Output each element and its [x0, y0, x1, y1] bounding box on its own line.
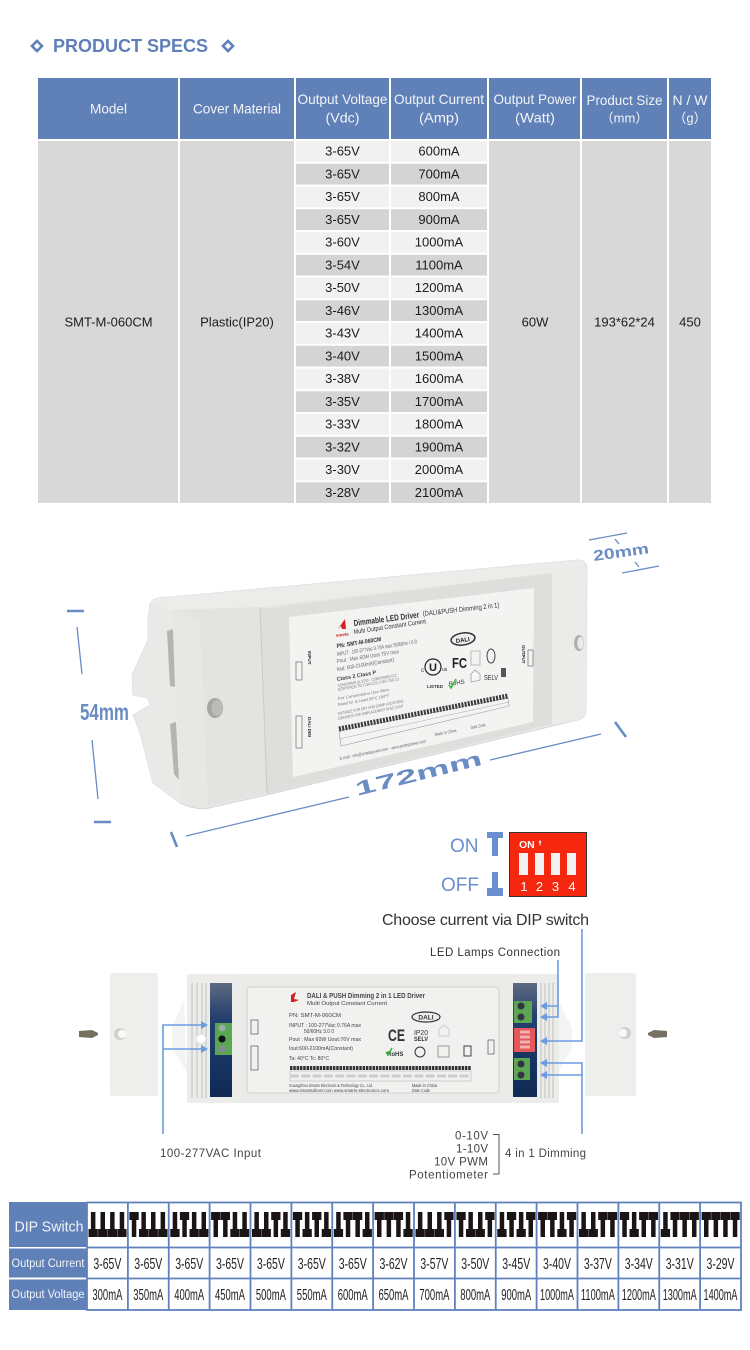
caption: dimming options: 10V PWM [434, 1156, 488, 1168]
dimension: 20mm [589, 533, 659, 573]
table voltage and current rows: 3-28V [325, 485, 360, 500]
icon: red DIP switch: 3 [552, 879, 559, 894]
icon: red DIP switch: 1 [520, 879, 528, 894]
label DIP table [290, 1068, 471, 1081]
table voltage and current rows: 1600mA [415, 371, 464, 386]
main cover with label: www.smartsdriver.com www.smarts-electronics.com [289, 1088, 389, 1093]
voltage values: 3-34V [625, 1256, 653, 1273]
current values: 500mA [256, 1287, 286, 1304]
on and off labels: ON [450, 836, 478, 857]
voltage values: 3-65V [175, 1256, 203, 1273]
current values: 800mA [460, 1287, 490, 1304]
table voltage and current rows: 2000mA [415, 462, 464, 477]
current values: 1300mA [663, 1287, 697, 1304]
heading: product specs: PRODUCT SPECS [53, 36, 208, 56]
main cover with label: Date Code [412, 1088, 430, 1093]
product label: CONVERTS FOR DIMPLACEMENT IN IEC 61347 [337, 703, 405, 721]
label certification marks: DALI [456, 637, 471, 645]
table voltage and current rows: 3-50V [325, 280, 360, 295]
product photo: opened driver top view [79, 973, 667, 1103]
product label: (DALI&PUSH Dimming 2 in 1) [422, 602, 500, 618]
table voltage and current rows: 3-46V [325, 303, 360, 318]
DIP switch legend [441, 832, 586, 896]
table voltage and current rows: 3-33V [325, 416, 360, 432]
table header row: Model [90, 100, 127, 116]
current values: 550mA [297, 1287, 327, 1304]
right housing fins [513, 974, 572, 1103]
table voltage and current rows: 1300mA [415, 303, 464, 318]
label logo [291, 992, 299, 1002]
row headers [9, 1202, 87, 1310]
label certification marks: RoHS [387, 1052, 403, 1058]
table merged columns: Plastic(IP20) [200, 314, 274, 330]
product label: Made in China [434, 728, 457, 737]
table voltage and current rows: 3-30V [325, 462, 360, 477]
label certification marks: U [429, 662, 437, 674]
table merged columns: 60W [522, 314, 549, 330]
label side terminals: INPUT [307, 651, 312, 665]
product photo: LED driver perspective view [132, 560, 587, 809]
table header row: (Amp) [419, 110, 459, 126]
current values: 1100mA [581, 1287, 615, 1304]
voltage values: 3-29V [706, 1256, 735, 1273]
icon: right screw [648, 1030, 667, 1038]
icon: off switch [487, 872, 503, 896]
voltage values: 3-57V [420, 1256, 449, 1273]
table merged columns: 450 [679, 314, 701, 330]
table voltage and current rows: 3-32V [325, 439, 360, 454]
product label: Dimmable LED Driver [353, 609, 420, 628]
table header row: (Vdc) [326, 110, 360, 126]
table voltage and current rows: 3-60V [325, 234, 360, 250]
product label [289, 588, 534, 777]
right terminal and red switch [514, 1001, 535, 1080]
label DIP table [339, 698, 509, 746]
product label: PN: SMT-M-060CM [336, 637, 382, 650]
voltage values: 3-65V [134, 1256, 163, 1273]
icon: red DIP switch: ON [519, 839, 535, 851]
table voltage and current rows: 3-40V [325, 348, 360, 363]
table header row: Cover Material [193, 100, 281, 116]
table voltage and current rows: 1700mA [415, 394, 464, 409]
label side terminals [251, 1020, 494, 1070]
ear shading [132, 604, 182, 803]
icon: red DIP switch: 2 [536, 879, 543, 894]
product label: Date Code [470, 722, 486, 730]
left terminal block [215, 1023, 232, 1055]
product label: For Connections Use Wire [337, 687, 390, 701]
voltage values: 3-40V [543, 1256, 571, 1273]
label certification marks: SELV [484, 675, 498, 682]
arrows: LED lamps [540, 960, 558, 1021]
table voltage and current rows: 800mA [418, 189, 460, 204]
table merged columns: 193*62*24 [594, 314, 655, 330]
driver silhouette [132, 560, 587, 809]
dimension: 172mm [171, 722, 626, 847]
arrow: DIP switch [540, 929, 582, 1045]
caption: dimming options: 0-10V [455, 1130, 488, 1142]
label certification marks [386, 1012, 471, 1058]
mounting holes [207, 698, 223, 718]
table voltage and current rows: 1800mA [415, 416, 464, 432]
icon: on switch [487, 832, 503, 856]
caption: dimming options: 1-10V [456, 1144, 488, 1156]
caption: AC input: 100-277VAC Input [160, 1148, 262, 1160]
table merged columns: SMT-M-060CM [64, 314, 153, 330]
caption: dimming options: Potentiometer [409, 1170, 488, 1182]
table voltage and current rows: 3-54V [325, 257, 360, 272]
table voltage and current rows: 3-65V [325, 212, 360, 227]
main cover with label: Ta: 40°C Tc: 80°C [289, 1056, 329, 1062]
product label: smets [336, 631, 350, 638]
product label: INPUT : 100-277Vac 0.75A max 50/60Hz I 0.9 [336, 639, 417, 658]
icon: red DIP switch [510, 832, 586, 896]
dimension: 20mm: 20mm [592, 540, 650, 565]
label side terminals: DALI DIM [307, 717, 312, 737]
left end cap [173, 607, 267, 806]
main cover with label: Pout : Max 60W Uout:76V max [289, 1037, 361, 1043]
label certification marks [421, 631, 506, 689]
label certification marks: CE [388, 1026, 405, 1045]
label certification marks: DALI [418, 1014, 434, 1022]
arrows: AC input [163, 1021, 208, 1134]
voltage values: 3-37V [584, 1256, 612, 1273]
grid [87, 1202, 741, 1310]
table merged columns [38, 141, 711, 503]
voltage values: 3-31V [666, 1256, 694, 1273]
label certification marks: FC [452, 655, 467, 672]
product label: Rated for at Least 90°C 194°F [337, 693, 390, 707]
label certification marks: SELV [414, 1037, 428, 1043]
current values: 700mA [419, 1287, 450, 1304]
dimension: 54mm [67, 611, 129, 822]
label side terminals [296, 645, 533, 748]
label certification marks: c [421, 668, 424, 674]
icon: red DIP switch: 4 [568, 879, 576, 894]
dimension: 172mm: 172mm [353, 748, 484, 801]
caption: dimming options [409, 1130, 488, 1182]
table header row: （mm） [601, 110, 648, 126]
side slots [167, 629, 175, 687]
table voltage and current rows: 3-43V [325, 326, 360, 340]
on and off labels: OFF [441, 875, 479, 896]
label certification marks: RoHS [448, 680, 465, 688]
voltage values: 3-65V [298, 1256, 326, 1273]
product label: Multi Output Constant Current [353, 618, 427, 636]
voltage values: 3-45V [502, 1256, 530, 1273]
current values: 350mA [133, 1287, 163, 1304]
label certification marks: LISTED [427, 684, 444, 689]
current values: 650mA [378, 1287, 409, 1304]
product label: E-mail : info@smetspower.com · www.smetspower.com [339, 738, 427, 761]
label certification marks: IP20 [414, 1030, 428, 1037]
table header row: (Watt) [515, 110, 555, 126]
voltage values [93, 1256, 735, 1273]
arrows: dimming [540, 1059, 582, 1134]
table voltage and current rows: 600mA [418, 144, 460, 158]
current values: 1000mA [540, 1287, 574, 1304]
current values: 400mA [174, 1287, 204, 1304]
main cover with label: Made in China [412, 1083, 437, 1088]
table voltage and current rows: 1100mA [415, 257, 463, 272]
product label: CONFORMS UL 8750 · CONFORMS FCC [337, 673, 397, 688]
main cover with label: Iout:600-2100mA(Constant) [289, 1046, 353, 1052]
main cover with label: 50/60Hz 3.0 0 [304, 1029, 334, 1035]
voltage values: 3-65V [339, 1256, 367, 1273]
left housing fins [172, 974, 234, 1103]
table voltage and current rows: 1200mA [415, 280, 464, 295]
table voltage and current rows: 900mA [418, 212, 460, 227]
caption: 4 in 1 dimming: 4 in 1 Dimming [505, 1148, 586, 1160]
left cover piece [110, 973, 158, 1096]
caption: choose current: Choose current via DIP switch [382, 912, 589, 929]
table voltage and current rows: 3-65V [325, 189, 360, 204]
current values: 450mA [215, 1287, 245, 1304]
icon: left screw [79, 1030, 98, 1038]
current values: 1200mA [622, 1287, 656, 1304]
label certification marks: us [442, 667, 448, 673]
main cover with label: DALI & PUSH Dimming 2 in 1 LED Driver [307, 993, 425, 1000]
table voltage and current rows: 1900mA [415, 439, 464, 454]
main cover with label [232, 974, 513, 1103]
on and off labels [441, 836, 479, 896]
voltage values: 3-65V [257, 1256, 285, 1273]
current values: 900mA [501, 1287, 531, 1304]
table header row: Output Voltage [298, 91, 388, 107]
table header row [38, 78, 711, 139]
table header row: （g） [673, 110, 707, 126]
current values: 600mA [338, 1287, 368, 1304]
table voltage and current rows: 2100mA [415, 485, 464, 500]
table: product specifications [38, 78, 711, 503]
product label: Iout: 600-2100mA(Constant) [336, 657, 395, 673]
voltage values: 3-65V [93, 1256, 122, 1273]
product label: SUITABLE FOR DRY AND DAMP LOCATIONS [337, 698, 404, 716]
row headers: Output Voltage [12, 1289, 84, 1301]
product label: Class 2 Class P [336, 670, 377, 683]
table voltage and current rows: 3-35V [325, 394, 360, 409]
right cover piece [585, 973, 636, 1096]
table voltage and current rows: 1400mA [415, 326, 464, 340]
current values: 300mA [92, 1287, 123, 1304]
current values [92, 1287, 738, 1304]
table: DIP switch settings [9, 1202, 741, 1310]
table voltage and current rows: 3-65V [325, 144, 360, 158]
dimension: 54mm: 54mm [80, 699, 129, 725]
main cover with label: Multi Output Constant Current [307, 1001, 388, 1007]
table voltage and current rows: 3-65V [325, 166, 360, 181]
product label: Pout : Max 60W Uout 75V max [336, 649, 400, 665]
top surface [150, 560, 586, 610]
table voltage and current rows: 1500mA [415, 348, 464, 363]
main cover with label: GuangZhou Smarts Electronic & Technology Co., Ltd. [289, 1083, 373, 1088]
main cover with label: INPUT : 100-277Vac 0.76A max [289, 1023, 361, 1029]
product label: CERTIFIED TO CSA C22.2 NO 250.13 [337, 676, 400, 692]
table header row: N / W [672, 92, 708, 108]
label side terminals: OUTPUT [521, 645, 526, 664]
row headers: Output Current [12, 1258, 85, 1270]
bracket [493, 1134, 499, 1174]
voltage values: 3-50V [461, 1256, 490, 1273]
table header row: Product Size [586, 93, 662, 108]
label logo [338, 619, 346, 629]
table voltage and current rows: 3-38V [325, 371, 360, 386]
row headers: DIP Switch [14, 1218, 84, 1236]
right end cap [552, 567, 587, 725]
table header row: Output Current [394, 91, 484, 107]
voltage values: 3-62V [380, 1256, 408, 1273]
DIP switch icons [88, 1212, 740, 1237]
table voltage and current rows: 700mA [418, 166, 460, 181]
voltage values: 3-65V [216, 1256, 244, 1273]
middle face [260, 573, 552, 794]
main cover with label: PN: SMT-M-060CM [289, 1013, 341, 1019]
caption: LED lamps: LED Lamps Connection [430, 947, 560, 959]
table voltage and current rows: 1000mA [415, 234, 464, 250]
table header row: Output Power [494, 91, 577, 107]
table voltage and current rows [296, 141, 487, 503]
